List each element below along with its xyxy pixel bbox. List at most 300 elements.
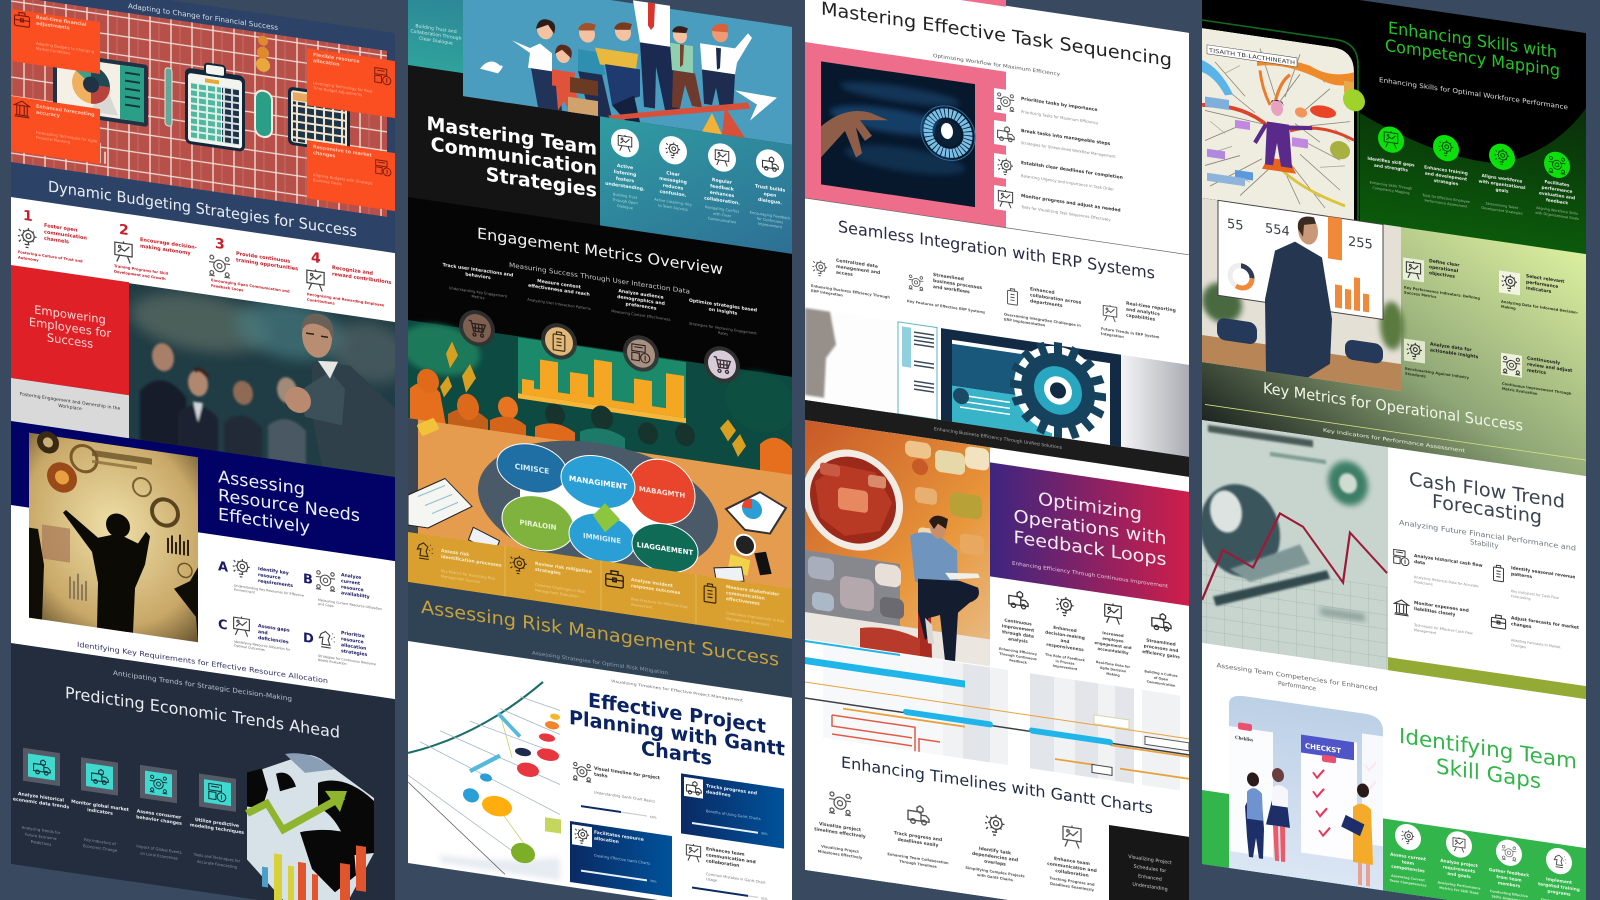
- slide: Assessing Risk Management Success: [408, 414, 792, 699]
- trend 1: historical data: Analyzing Trends for: [22, 825, 61, 835]
- item: Establish deadlines: [994, 153, 1123, 196]
- trend 4: predictive modeling: modeling techniques: [190, 822, 244, 836]
- benefit 4: of Open: [1154, 676, 1169, 682]
- benefit 1: Enhancing Efficiency: [999, 647, 1038, 656]
- heading: Mastering Team Communication Strategies: Communication: [431, 132, 597, 180]
- item C: deficiencies: [258, 635, 289, 646]
- heading band: Assessing Risk Management Success: Assessing Risk Management Success: [421, 597, 779, 671]
- feature: Visualize project timelines: Visualizing Project: [821, 844, 859, 854]
- item: historical cash flow: data: [1414, 559, 1425, 567]
- panel: gray subtitle block: Fostering Engagement and Ownership in the: [20, 391, 120, 412]
- item A: Environment: [234, 588, 256, 595]
- skill 4: evaluation and: [1539, 190, 1575, 201]
- item D: Needs Evaluation: [318, 658, 347, 666]
- item: adjust forecasts: changes: [1511, 621, 1532, 630]
- item C: Assess gaps: [258, 623, 290, 634]
- feature: Enhance team communication: Deadlines Seamlessly: [1050, 882, 1095, 892]
- feature 3: ERP Implementation: [1004, 317, 1046, 328]
- benefit 1: improvement: [1002, 623, 1034, 634]
- step 4: reward contributions: [332, 271, 391, 286]
- caption: Identifying Key Requirements: Identifying Key Requirements for Effective Resource Allocation: [77, 640, 328, 685]
- metric 4: metrics: [1527, 367, 1546, 376]
- step 2: [510, 554, 592, 601]
- step 2: Review risk mitigation: [535, 561, 592, 575]
- card: Visual timeline for project tasks: 60%: [650, 815, 657, 820]
- woman in white blouse: [512, 14, 562, 111]
- action 1: Assessing Current: [1391, 874, 1425, 883]
- step 2: 2: [119, 222, 129, 239]
- block: dark tagline: Enhanced: [1138, 873, 1162, 883]
- skill 1: Enhancing Skills Through: [1370, 180, 1412, 191]
- practice 4: open: [764, 192, 776, 199]
- card: Enhances team communication: communication and: [706, 852, 756, 865]
- heading: Enhancing Timelines with Gantt Charts: Enhancing Timelines with Gantt Charts: [841, 753, 1153, 817]
- trend 1: historical data: [13, 746, 69, 850]
- feature 1: Enhancing Business Efficiency Through: [811, 284, 890, 300]
- benefit 1: [999, 588, 1038, 666]
- action 1: team: [1402, 859, 1415, 867]
- card: Tracks progress and deadlines: deadlines: [706, 789, 731, 799]
- practice 1: Building Trust: [613, 192, 638, 200]
- step 1: [18, 210, 87, 262]
- metric 4: Metric Evaluation: [1502, 387, 1538, 396]
- trend 2: market indicators: indicators: [87, 807, 113, 817]
- trend 3: consumer behavior: [136, 764, 182, 861]
- skill 2: Performance Assessment: [1425, 199, 1468, 209]
- step 1: Autonomy: [18, 256, 39, 263]
- heading: Assessing Resource Needs Effectively: Assessing: [218, 467, 305, 500]
- heading: Enhancing Skills with Competency Mapping: Enhancing Skills with: [1388, 18, 1557, 62]
- benefit 1: analysis: [1008, 636, 1028, 645]
- feature: Enhance team communication: Enhance team: [1054, 856, 1090, 867]
- subtitle: Assessing Team Competencies for Enhanced: [1216, 662, 1378, 693]
- metric 4: Continuously: [1527, 355, 1560, 366]
- feature: Identify dependencies: dependencies and: [972, 851, 1018, 864]
- action 2: Metrics for Skill Gaps: [1439, 886, 1479, 895]
- skill 4: Aligning Workforce Skills: [1536, 206, 1578, 216]
- skill 2: and development: [1425, 171, 1467, 183]
- illustration: audience before an orange bar chart in the jungle: [400, 319, 795, 477]
- metric 1: objectives: [1429, 270, 1455, 280]
- action 3: members: [1498, 880, 1521, 890]
- feature: Enhance team communication: Tracking Progress and: [1049, 876, 1095, 887]
- panel: four skill gap actions: [1383, 818, 1586, 900]
- benefit 2: in Process: [1056, 659, 1075, 666]
- subtitle: Anticipating Trends for Strategic Decision-Making: [113, 669, 292, 703]
- slide: Mastering Team Communication Strategies: [408, 0, 792, 255]
- action 1: Assess current: [1390, 851, 1426, 863]
- benefit 2: and: [1060, 638, 1070, 645]
- feature 2: [907, 268, 985, 315]
- feature 1: ERP Integration: [811, 289, 843, 298]
- panel: gradient title banner: Operations with: [1014, 507, 1167, 549]
- item D: allocation: [341, 642, 366, 652]
- item D: resource: [341, 636, 364, 645]
- slide: Cash Flow Trend Forecasting: [1200, 420, 1586, 700]
- benefit 3: Making: [1106, 672, 1120, 678]
- slide: Identifying Team Skill Gaps: [1202, 643, 1586, 900]
- woman in red with case: [552, 43, 598, 116]
- item B: and Gaps: [318, 602, 334, 608]
- practice 1: Through Open: [611, 198, 638, 206]
- callout: Real-time financial adjustments: [11, 9, 100, 74]
- metric 2: [1499, 269, 1579, 320]
- practice 2: confusion.: [660, 189, 687, 199]
- panel: red title block: Empowering: [34, 302, 106, 327]
- metric 3: Measuring Content Effectiveness: [611, 309, 671, 322]
- step 4: [306, 252, 391, 306]
- item: historical cash flow: Analyzing Historical Data for Accurate: [1414, 575, 1478, 588]
- photo: executive viewing a KPI dashboard: 55: [1227, 217, 1244, 234]
- item: Break tasks: Break tasks into manageable steps: [1021, 128, 1111, 147]
- metric 3: Analyze audience: [618, 288, 664, 301]
- step 1: 1: [23, 208, 33, 225]
- feature: Enhance team communication: communication and: [1047, 861, 1097, 874]
- benefit 2: The Role of Feedback: [1045, 653, 1086, 663]
- panel: gradient title banner: Enhancing Efficiency Through Continuous Improvement: [1012, 561, 1168, 590]
- metric 4: [689, 298, 757, 388]
- card: Tracks progress and deadlines: [681, 773, 784, 849]
- skill 3: [1479, 140, 1526, 216]
- metric 3: Benchmarking Against Industry: [1405, 367, 1470, 380]
- slide: Enhancing Timelines with Gantt Charts: [805, 639, 1189, 900]
- illustration: team reviewing a checklist: Chekliss: [1235, 736, 1253, 743]
- feature 3: departments: [1030, 298, 1063, 309]
- step 2: Common Challenges in Risk: [535, 583, 586, 594]
- practice 3: feedback: [710, 183, 735, 193]
- practice 2: [654, 133, 693, 213]
- metric 1: Understanding Key Engagement: [449, 286, 508, 299]
- callout: Enhanced forecasting accuracy: Forecasting Techniques for Agile: [36, 130, 98, 144]
- practice 3: Regular: [712, 177, 733, 186]
- step 3: [208, 238, 298, 293]
- caption band: Enhancing Business Efficiency Through Unified Solutions: [805, 400, 1189, 478]
- metric 2: Analyzing User Interaction Patterns: [527, 298, 591, 311]
- feature: Track progress: Enhancing Team Collaboration: [887, 852, 949, 865]
- skill 2: [1421, 131, 1470, 209]
- metric 3: Standards: [1405, 372, 1426, 379]
- feature 1: management and: [836, 264, 880, 276]
- feature: Visualize project timelines: timelines effectively: [814, 826, 866, 840]
- item A: requirements: [258, 578, 293, 589]
- panel: gradient title banner: [990, 462, 1189, 606]
- practice 3: collaboration.: [704, 195, 740, 207]
- practice 1: Dialogue: [617, 204, 634, 210]
- step 1: Foster open: [44, 223, 78, 234]
- slide: Empowering Employees for Success: [11, 262, 410, 480]
- subtitle: Analyzing Future Financial Performance and: [1399, 518, 1576, 553]
- item B: Analyze: [341, 572, 361, 581]
- feature 4: Future Trends in ERP System: [1101, 327, 1160, 339]
- practice 1: [605, 126, 645, 212]
- illustration: risk diagram on an orange desk: CIMISCE: [515, 462, 549, 476]
- benefit 4: Communication: [1147, 680, 1176, 688]
- heading: Effective Project Planning with Gantt Charts: Charts: [641, 737, 712, 770]
- metric 2: performance: [1526, 279, 1558, 290]
- callout: Responsive to market changes: Responsive to market: [313, 144, 373, 159]
- photo: executive viewing a KPI dashboard: 255: [1348, 234, 1373, 253]
- benefit 2: Enhanced: [1053, 625, 1077, 634]
- metric 4: Optimize strategies based: [689, 298, 757, 314]
- skill 3: with organizational: [1479, 178, 1526, 191]
- practice 1: listening: [614, 169, 636, 178]
- heading: Mastering Team Communication Strategies: Mastering Team: [427, 112, 597, 160]
- action 2: Analyze project: [1440, 858, 1478, 869]
- card: Tracks progress and deadlines: Tracks progress and: [706, 783, 757, 797]
- heading: Mastering Team Communication Strategies: Strategies: [486, 163, 597, 202]
- panel: gray subtitle block: Workplace: [58, 403, 82, 412]
- benefit 3: accountability: [1097, 646, 1129, 655]
- practice 4: Encouraging Feedback: [750, 211, 791, 221]
- metric 2: Making: [1501, 305, 1516, 311]
- item: expenses and liabilities: liabilities closely: [1414, 606, 1455, 618]
- item: Establish deadlines: Establish clear deadlines for completion: [1021, 160, 1123, 181]
- callout: Flexible resource allocation: Time Budget Adjustments: [312, 85, 362, 97]
- panel: teal tagline block: Clear Dialogue: [419, 36, 453, 47]
- subtitle: Stability: [1470, 537, 1499, 550]
- illustration: team reviewing a checklist: [1229, 694, 1383, 890]
- step 3: 3: [215, 236, 225, 253]
- benefit 3: Real-Time Data for: [1096, 660, 1130, 669]
- benefit 1: Continuous: [1004, 618, 1032, 628]
- feature 4: capabilities: [1126, 313, 1155, 323]
- callout: Real-time financial adjustments: Real-time financial: [36, 15, 87, 28]
- item B: availability: [341, 590, 370, 600]
- card: Facilitates resource allocation: [570, 821, 672, 897]
- item D: [304, 630, 376, 666]
- card: Facilitates resource allocation: Facilitates resource: [594, 830, 644, 843]
- practice 3: Navigating Conflict: [705, 205, 740, 214]
- photo: executive viewing a KPI dashboard: [1202, 198, 1404, 391]
- trend 4: predictive modeling: [190, 772, 244, 871]
- panel: red title block: Employees for: [29, 315, 111, 341]
- block: dark tagline: Visualizing Project: [1128, 854, 1172, 866]
- column 1: finance and people slides: [11, 0, 410, 900]
- subtitle: Optimizing Workflow for Maximum Efficiency: [933, 53, 1060, 78]
- trend 2: market indicators: Key Indicators of: [84, 837, 116, 846]
- skill 4: [1535, 149, 1579, 221]
- metric 4: Continuous Improvement Through: [1502, 382, 1572, 396]
- step 4: Measure stakeholder: [726, 584, 780, 598]
- skill 1: Competency Mapping: [1372, 186, 1410, 195]
- item: historical cash flow: Predictions: [1414, 580, 1433, 587]
- panel: red title block: [11, 265, 129, 395]
- step 2: making autonomy: [140, 243, 191, 257]
- heading: Enhancing Skills with Competency Mapping: Competency Mapping: [1385, 36, 1560, 80]
- item: Break tasks: Strategies for Streamlined Workflow Management: [1021, 140, 1116, 159]
- feature 4: [1101, 297, 1176, 347]
- slide: Effective Project Planning with Gantt Charts: [408, 641, 792, 900]
- item: Monitor progress: [994, 185, 1121, 228]
- practice 3: Communication: [708, 216, 736, 225]
- photo: silhouette at a data wall: [29, 429, 198, 642]
- feature 3: [1004, 282, 1082, 333]
- slide: Key Metrics for Operational Success: [1202, 198, 1586, 477]
- callout: Flexible resource allocation: Leveraging Technology for Real-: [313, 80, 374, 94]
- callout: Real-time financial adjustments: Market Conditions: [36, 46, 70, 56]
- trend 3: consumer behavior: behavior changes: [136, 814, 182, 827]
- skill 2: Tools for Effective Employee: [1421, 193, 1470, 204]
- item: adjust forecasts: Adjust forecasts for market: [1511, 615, 1579, 631]
- step 1: Assess risk: [441, 548, 470, 558]
- skill 2: Enhances training: [1424, 164, 1468, 177]
- feature: Visualize project timelines: Visualize project: [819, 821, 862, 833]
- step 4: communication: [726, 590, 765, 602]
- trend 1: historical data: Analyze historical: [18, 791, 64, 804]
- benefit 4: processes and: [1144, 643, 1178, 654]
- slide: Optimizing Operations with Feedback Loops: [803, 420, 1189, 699]
- heading: Cash Flow Trend Forecasting: Cash Flow Trend: [1409, 467, 1565, 513]
- block: dark tagline: [1109, 825, 1189, 900]
- metric 1: [1403, 254, 1480, 306]
- step 1: channels: [44, 236, 69, 245]
- action 2: [1438, 828, 1481, 896]
- panel: four communication practices: [600, 116, 792, 255]
- heading: Engagement Metrics Overview: Engagement Metrics Overview: [477, 224, 723, 279]
- feature: Identify dependencies: overlaps: [984, 859, 1006, 868]
- feature 1: [811, 254, 890, 305]
- heading: Mastering Effective Task Sequencing: Mastering Effective Task Sequencing: [821, 0, 1172, 71]
- panel: four risk review steps on gold band: [408, 532, 792, 639]
- item C: Optimal Outcomes: [234, 644, 265, 652]
- benefit 4: efficiency gains: [1142, 649, 1180, 661]
- slide: Predicting Economic Trends Ahead: [11, 643, 395, 900]
- feature 3: Overcoming Integration Challenges in: [1004, 312, 1081, 328]
- step 2: Management Evaluation: [535, 588, 579, 599]
- action 3: from team: [1496, 874, 1522, 884]
- slide: Engagement Metrics Overview: [400, 196, 795, 477]
- skill 4: feedback: [1546, 197, 1568, 206]
- callout: Enhanced forecasting accuracy: Enhanced forecasting: [36, 104, 95, 118]
- step 1: Management Success: [441, 574, 480, 584]
- heading: Predicting Economic Trends Ahead: Predicting Economic Trends Ahead: [65, 683, 340, 742]
- heading band: Assessing Risk Management Success: Assessing Strategies for Optimal Risk Mitigation: [532, 650, 668, 676]
- feature: Identify dependencies: [965, 810, 1025, 884]
- step 1: communication: [44, 229, 87, 242]
- illustration: globe hexagon with rising arrow: [247, 746, 374, 900]
- trend 2: market indicators: [71, 756, 130, 855]
- practice 1: Active: [617, 163, 633, 171]
- item C: [218, 616, 290, 651]
- benefit 2: responsiveness: [1046, 642, 1084, 653]
- skill 2: strategies: [1434, 178, 1459, 187]
- skill 3: goals: [1496, 187, 1509, 195]
- item D: Strategies for Continuous Resource: [318, 654, 376, 666]
- illustration: budgeting dashboard on red grid: [11, 0, 387, 217]
- callout: Enhanced forecasting accuracy: Financial Planning: [36, 135, 71, 145]
- metric 2: effectiveness and reach: [528, 283, 590, 298]
- item: Prioritize tasks: Prioritize tasks by importance: [1021, 96, 1097, 113]
- metric 3: [611, 287, 671, 376]
- item D: D: [303, 631, 314, 647]
- step 3: Encouraging Open Communication and: [211, 278, 290, 294]
- card: Enhances team communication: Usage: [706, 877, 718, 883]
- practice 2: Active Listening: Key: [654, 197, 693, 207]
- decorative green swoosh: [1360, 75, 1586, 255]
- illustration: risk diagram on an orange desk: [408, 414, 792, 600]
- action 3: Conducting Effective: [1490, 889, 1529, 899]
- illustration: ERP gear on monitor with touching hand: [805, 305, 1189, 458]
- item: expenses and liabilities: [1394, 597, 1473, 641]
- callout: Flexible resource allocation: [307, 48, 396, 118]
- item B: Measuring Current Resource Utilization: [318, 598, 382, 611]
- card: Tracks progress and deadlines: Benefits of Using Gantt Charts: [706, 809, 761, 821]
- callout: Flexible resource allocation: Flexible resource: [313, 52, 360, 65]
- metric 2: Measure content: [537, 278, 582, 291]
- illustration: celebrating team on an arrow: [463, 0, 792, 147]
- callout: Flexible resource allocation: allocation: [313, 58, 340, 68]
- item A: resource: [258, 572, 281, 581]
- skill 3: Aligns workforce: [1482, 173, 1522, 185]
- benefit 2: decision-making: [1045, 630, 1085, 641]
- trend 1: historical data: economic data trends: [13, 796, 69, 811]
- heading: Adapting to Change for Financial Success: Adapting to Change for Financial Success: [128, 1, 278, 32]
- panel: teal tagline block: Building Trust and: [415, 23, 457, 35]
- feature: Visualize project timelines: Milestones Effectively: [818, 849, 863, 860]
- callout: Enhanced forecasting accuracy: accuracy: [36, 110, 61, 119]
- metric 2: indicators: [1526, 285, 1552, 295]
- step 4: effectiveness: [726, 596, 760, 607]
- item A: Understanding Key Resources for Effective: [234, 584, 304, 598]
- metric 3: preferences: [626, 301, 657, 312]
- step 4: Continuous Improvement in Risk: [726, 611, 785, 624]
- action 1: Team Competencies: [1390, 878, 1426, 888]
- metric 2: [527, 277, 591, 364]
- metric 3: Analyze data for: [1430, 341, 1472, 353]
- card: Facilitates resource allocation: Creating Effective Gantt Charts: [594, 854, 650, 866]
- illustration: risk diagram on an orange desk: MANAGIMENT: [569, 474, 628, 492]
- trend 1: historical data: Future Economic: [25, 832, 57, 841]
- photo: hand touching digital interface: [821, 61, 975, 207]
- metric 1: Define clear: [1429, 258, 1460, 269]
- metric 3: demographics and: [617, 294, 665, 307]
- skill 3: Streamlining Talent: [1486, 201, 1519, 210]
- practice 4: [750, 147, 791, 231]
- heading: Effective Project Planning with Gantt Charts: Planning with Gantt: [569, 706, 785, 761]
- item: historical cash flow: Analyze historical cash flow: [1414, 553, 1483, 569]
- practice 3: with Clear: [713, 212, 732, 218]
- man at centre with red tie: [633, 0, 680, 112]
- feature 4: Real-time reporting: [1126, 301, 1176, 314]
- green corner block: [1202, 790, 1229, 868]
- item D: Prioritize: [341, 630, 365, 640]
- skill 4: with Organizational Goals: [1535, 211, 1579, 221]
- benefit 3: Increased: [1102, 630, 1124, 638]
- callout: Responsive to market changes: Aligning Budgets with Strategic: [313, 172, 373, 186]
- step 4: Recognize and: [332, 265, 373, 277]
- subtitle: Enhancing Skills for Optimal Workforce Performance: [1379, 76, 1568, 111]
- subtitle: Visualizing Timelines for Effective Project Management: [611, 679, 744, 703]
- slide: Enhancing Skills with Competency Mapping: [1202, 0, 1586, 255]
- panel: gradient title banner: Optimizing: [1038, 490, 1142, 525]
- card: Visual timeline for project tasks: Understanding Gantt Chart Basics: [594, 791, 655, 804]
- card: Facilitates resource allocation: allocation: [594, 836, 619, 845]
- heading: Identifying Team Skill Gaps: Skill Gaps: [1436, 753, 1541, 793]
- heading: Seamless Integration with ERP Systems: Seamless Integration with ERP Systems: [838, 217, 1155, 283]
- metric 4: [1501, 352, 1573, 401]
- caption band: Enhancing Business Efficiency Through Unified Solutions: Enhancing Business Efficiency Through Unified Solutions: [934, 426, 1063, 451]
- step 3: [606, 570, 689, 615]
- metric 1: behaviors: [465, 272, 491, 281]
- item B: B: [303, 572, 313, 588]
- practice 2: to Team Success: [658, 204, 688, 212]
- card: Tracks progress and deadlines: 98%: [761, 831, 768, 836]
- column 4: competency, metrics, cash flow and skill gap slides: [1200, 0, 1586, 900]
- item A: [218, 559, 304, 597]
- feature 2: Key Features of Effective ERP Systems: [907, 299, 985, 315]
- metric 2: Analyzing Data for Informed Decision-: [1501, 300, 1579, 315]
- column 3: task sequencing, ERP, feedback and Gantt slides: [803, 0, 1189, 900]
